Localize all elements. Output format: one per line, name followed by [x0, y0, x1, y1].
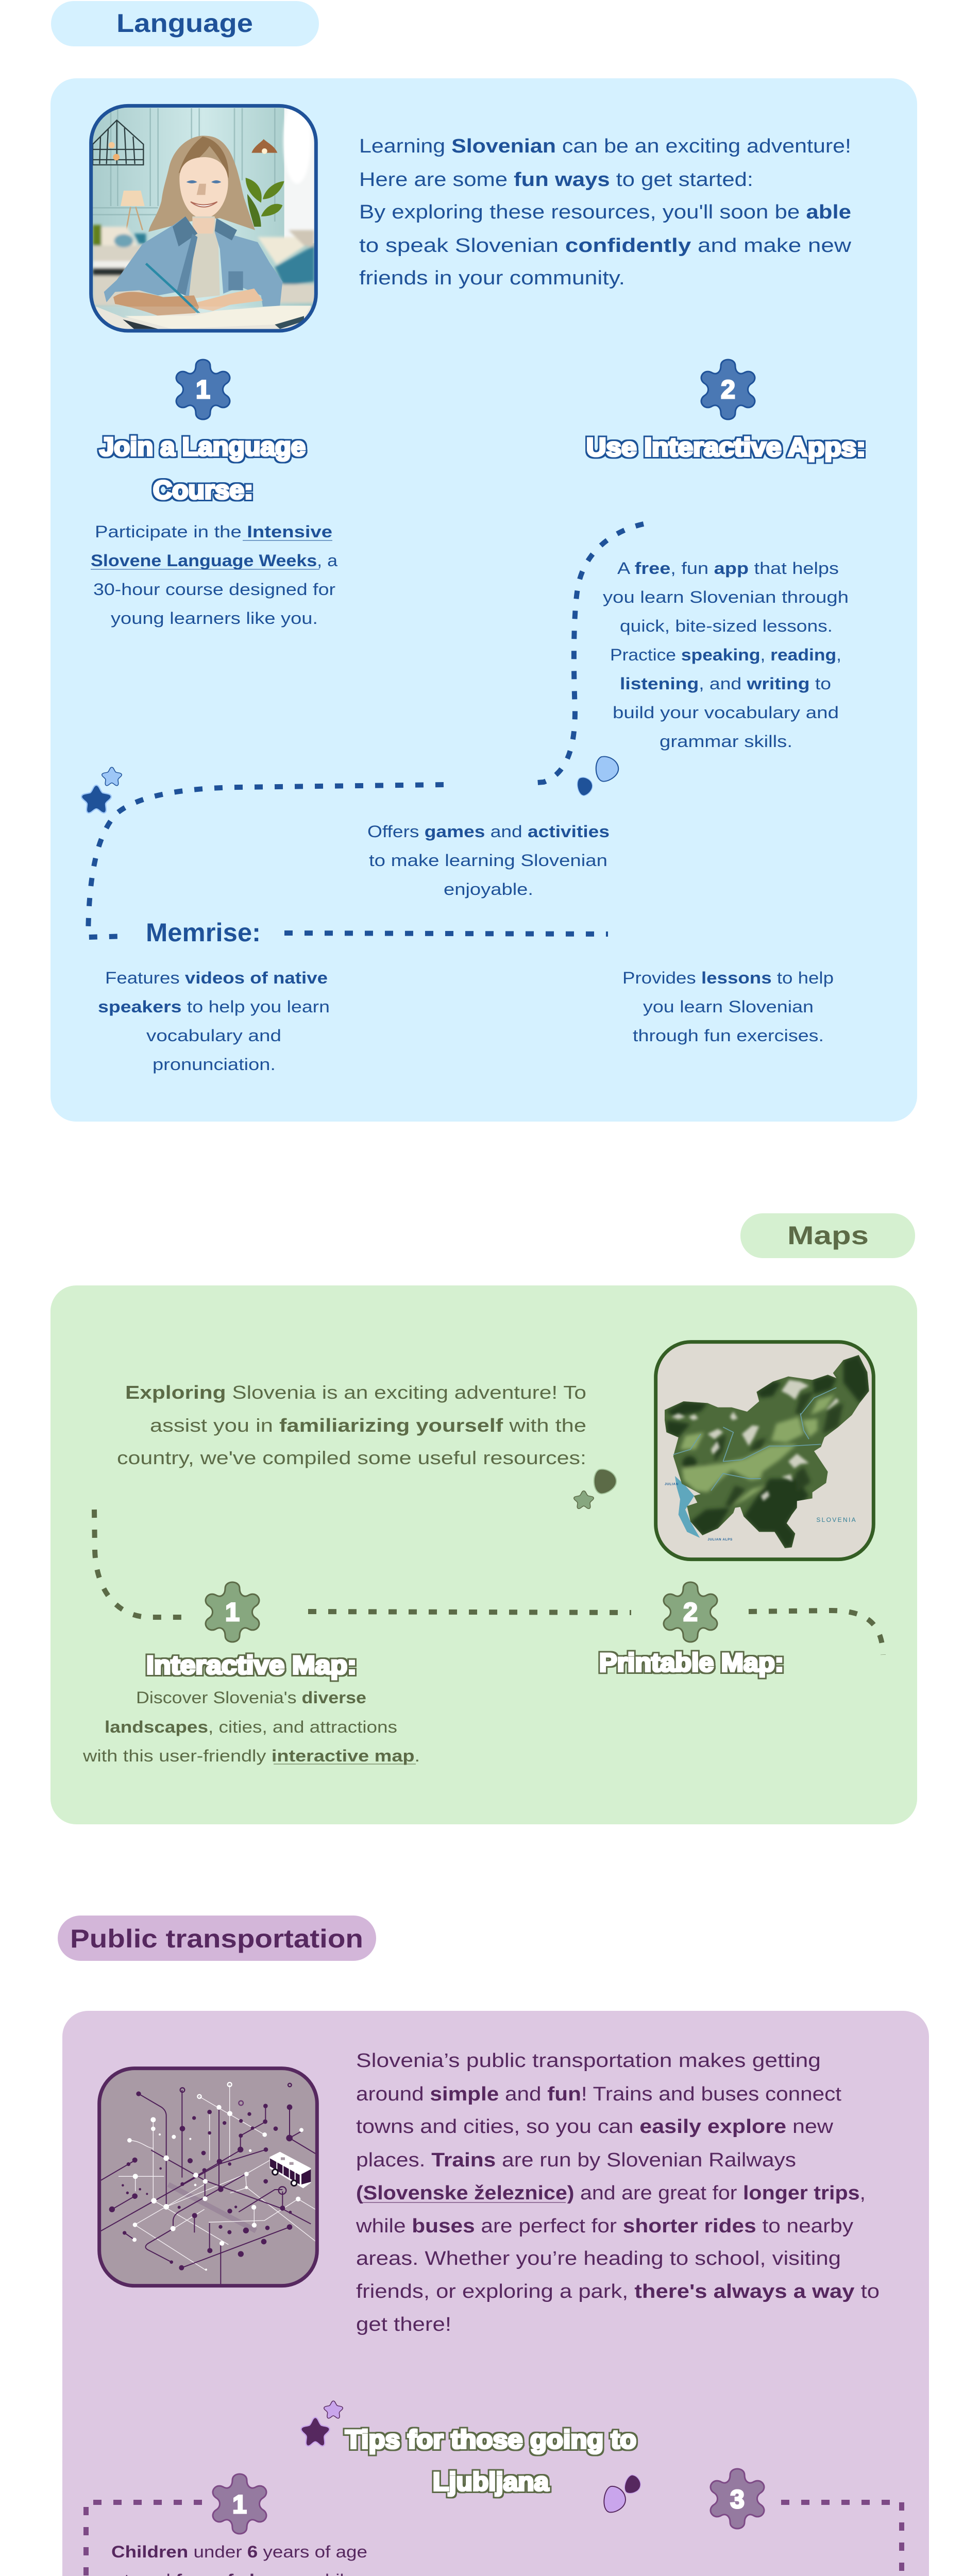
text: Memrise features: pronunciation. — [153, 1055, 276, 1074]
section heading: Maps: Maps — [787, 1221, 869, 1250]
text: interactive apps: you learn Slovenian through — [603, 588, 849, 606]
light lines — [119, 2085, 315, 2270]
icon: decorative stars — [81, 767, 122, 813]
text: language course — [91, 522, 337, 628]
text: language course: Participate in the Intensive — [95, 522, 332, 541]
text: maps intro — [117, 1382, 586, 1468]
heading: Interactive Map: Interactive Map: — [146, 1651, 357, 1680]
text: transit intro: towns and cities, so you can easily explore new — [356, 2116, 834, 2138]
text: games and activities: enjoyable. — [444, 880, 533, 899]
text: Memrise features — [98, 969, 330, 1074]
image: relief map of Slovenia: JULIAN ALPS — [707, 1538, 733, 1541]
text: language course: 30-hour course designed for — [93, 580, 335, 599]
text: transit intro: places. Trains are run by Slovenian Railways — [356, 2149, 796, 2171]
text: Memrise features: speakers to help you learn — [98, 997, 330, 1016]
table and notebook — [95, 307, 312, 317]
image: relief map of Slovenia: SLOVENIA — [816, 1516, 857, 1523]
panel: Language — [50, 78, 917, 1122]
heading: Join a Language Course: Course: — [153, 476, 253, 504]
arms and pen — [113, 292, 199, 315]
text: transit intro: Slovenia’s public transportation makes getting — [356, 2050, 821, 2072]
dashed path: transit route — [86, 2502, 902, 2576]
text: Memrise lessons — [622, 969, 834, 1045]
text: transit intro — [356, 2050, 880, 2335]
text: maps intro: Exploring Slovenia is an exciting adventure! To — [125, 1382, 586, 1403]
image: relief map of Slovenia — [656, 1342, 873, 1560]
heading: Join a Language Course: Join a Language — [99, 432, 306, 461]
image: relief map of Slovenia: JULIAN — [665, 1483, 679, 1486]
heading: Use Interactive Apps: Use Interactive Apps: — [586, 433, 866, 462]
text: interactive apps: grammar skills. — [660, 732, 792, 751]
text: interactive map: landscapes , cities, and attractions — [105, 1718, 397, 1736]
icon: step badge 1: 1 — [196, 375, 210, 404]
text: Memrise features: vocabulary and — [146, 1026, 281, 1045]
intro text: friends in your community. — [359, 267, 625, 289]
text: language course: Slovene Language Weeks , a — [91, 551, 337, 570]
face — [179, 157, 228, 218]
icon: step badge 1 — [176, 360, 230, 419]
text: transit intro: around simple and fun! Trains and buses connect — [356, 2083, 841, 2105]
panel: Maps — [50, 1285, 917, 1824]
text: games and activities — [367, 822, 610, 899]
text: transit intro: areas. Whether you’re heading to school, visiting — [356, 2248, 841, 2269]
section heading: Public transportation — [58, 1916, 376, 1961]
text: interactive map — [82, 1688, 420, 1765]
icon: step badge 1 — [213, 2474, 266, 2534]
text: interactive apps: quick, bite-sized lessons. — [620, 617, 833, 635]
hair — [148, 135, 255, 232]
neck and tee — [189, 216, 220, 299]
heading: Tips for those going to Ljubljana — [345, 2425, 636, 2496]
text: Memrise features: Features videos of native — [105, 969, 328, 987]
text: transit intro: friends, or exploring a park, there's always a way to — [356, 2281, 880, 2302]
icon: step badge 1: 1 — [225, 1598, 240, 1626]
text: games and activities: Offers games and activities — [367, 822, 610, 841]
text: children fares: Children under 6 years of age — [111, 2543, 367, 2561]
intro text: By exploring these resources, you'll soon be able — [359, 201, 851, 223]
icon: step badge 2: 2 — [683, 1598, 698, 1626]
text: interactive apps: Practice speaking , reading , — [610, 646, 841, 664]
text: interactive apps: A free , fun app that helps — [617, 559, 839, 578]
dark lines — [99, 2090, 315, 2286]
icon: step badge 1: 1 — [232, 2490, 247, 2519]
text: Memrise lessons: Provides lessons to help — [622, 969, 834, 987]
icon: step badge 2: 2 — [721, 375, 735, 404]
icon: decorative stars — [301, 2401, 343, 2446]
heading: Printable Map: Printable Map: — [599, 1648, 784, 1677]
text: transit intro: while buses are perfect for shorter rides to nearby — [356, 2215, 853, 2237]
image: smiling girl writing in a notebook — [91, 98, 316, 331]
text: games and activities: to make learning Slovenian — [369, 851, 607, 870]
intro text: Here are some fun ways to get started: — [359, 169, 753, 191]
image: isometric transit network with bus — [99, 2069, 317, 2286]
bus — [269, 2152, 311, 2188]
icon: decorative blob and star — [574, 1469, 616, 1509]
text: interactive apps: listening , and writing to — [620, 674, 831, 693]
text: Memrise lessons: through fun exercises. — [633, 1026, 824, 1045]
text: maps intro: assist you in familiarizing yourself with the — [150, 1415, 586, 1436]
text: transit intro: get there! — [356, 2314, 451, 2335]
white stops — [127, 2105, 303, 2270]
icon: decorative blobs — [576, 756, 618, 796]
text: Memrise lessons: you learn Slovenian — [643, 997, 814, 1016]
dark stops — [109, 2091, 293, 2270]
intro text: to speak Slovenian confidently and make new — [359, 235, 852, 257]
text: interactive apps: build your vocabulary and — [613, 703, 839, 722]
text: interactive map: with this user-friendly interactive map . — [82, 1747, 420, 1765]
text: language course: young learners like you. — [111, 609, 318, 628]
intro text: Learning Slovenian can be an exciting adventure! — [359, 135, 851, 157]
heading: Tips for those going to Ljubljana: Ljubljana — [433, 2467, 549, 2496]
intro text — [359, 135, 852, 289]
icon: step badge 3 — [711, 2469, 764, 2529]
icon: step badge 2 — [664, 1582, 717, 1642]
section heading: Maps — [740, 1213, 915, 1258]
icon: step badge 3: 3 — [730, 2485, 745, 2514]
text: interactive apps — [603, 559, 849, 751]
icon: step badge 1 — [206, 1582, 259, 1642]
jacket — [104, 216, 196, 302]
text: maps intro: country, we've compiled some useful resources: — [117, 1447, 586, 1468]
section heading: Language: Language — [116, 9, 253, 38]
section heading: Public transportation: Public transportation — [70, 1924, 363, 1953]
icon: step badge 2 — [701, 360, 755, 419]
text: transit intro: (Slovenske železnice) and are great for longer trips , — [356, 2182, 866, 2204]
panel: Public transportation — [62, 2011, 929, 2576]
icon: decorative blobs — [602, 2473, 643, 2514]
dashed path: maps route — [94, 1510, 883, 1655]
text: children fares — [111, 2543, 367, 2576]
text: interactive map: Discover Slovenia's diverse — [136, 1688, 366, 1707]
heading: Memrise: Memrise: — [146, 918, 261, 947]
heading: Join a Language Course — [99, 432, 306, 504]
heading: Tips for those going to Ljubljana: Tips for those going to — [345, 2425, 636, 2454]
section heading: Language — [51, 1, 319, 46]
dashed path: language route — [88, 524, 644, 937]
